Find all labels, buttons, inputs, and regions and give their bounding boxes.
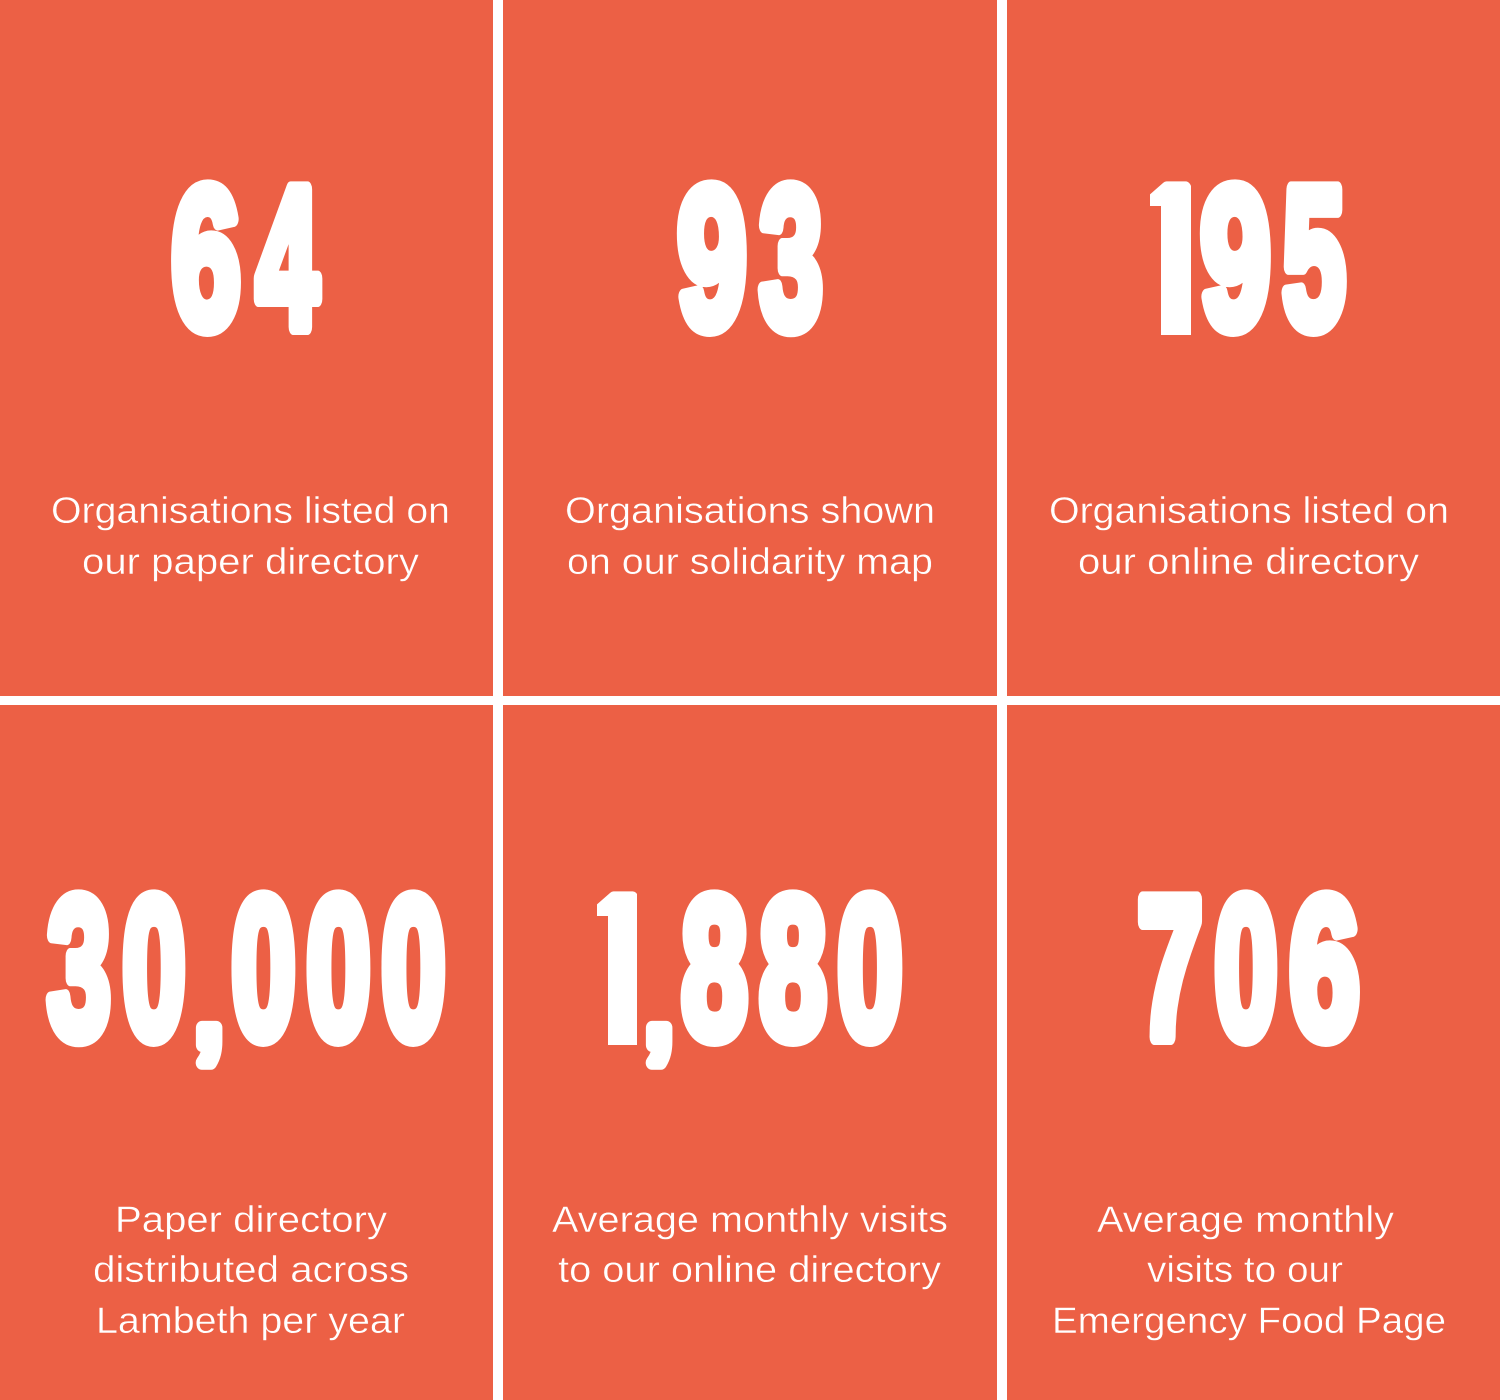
number: 30,000: 0 [382, 857, 446, 1080]
text: paper directory distributed across Lambeth per year: Paper directory [115, 1199, 388, 1240]
number: 64: 4 [256, 147, 318, 370]
number: 93: 3 [760, 147, 822, 370]
panel: paper directory distribution [0, 705, 493, 1400]
text: organisations listed on our paper directory: Organisations listed on [51, 490, 450, 531]
text: average monthly visits to our online directory: to our online directory [558, 1249, 942, 1290]
number: 30,000: 0 [122, 857, 186, 1080]
text: average monthly visits to our Emergency Food Page: Emergency Food Page [1052, 1300, 1446, 1341]
number: 195 [1150, 179, 1347, 337]
panel: emergency food page monthly visits [1007, 705, 1500, 1400]
text: average monthly visits to our online directory: Average monthly visits [552, 1199, 948, 1240]
text: organisations shown on our solidarity map: Organisations shown [565, 490, 935, 531]
number: 195: 9 [1200, 147, 1270, 370]
number: 1,880 [597, 889, 902, 1070]
number: 706: 6 [1290, 857, 1360, 1080]
number: 30,000: , [195, 942, 223, 1070]
number: 64: 6 [172, 147, 240, 370]
number: 1,880: 1 [578, 857, 660, 1080]
number: 30,000: 0 [232, 857, 296, 1080]
text: paper directory distributed across Lambeth per year: distributed across [93, 1249, 409, 1290]
number: 30,000: 3 [48, 857, 110, 1080]
number: 1,880: 8 [682, 857, 748, 1080]
number: 1,880: 0 [838, 857, 902, 1080]
text: organisations listed on our paper directory: our paper directory [82, 541, 420, 582]
panel: online directory organisations [1007, 0, 1500, 696]
number: 93: 9 [678, 147, 746, 370]
panel: paper directory organisations [0, 0, 493, 696]
text: paper directory distributed across Lambeth per year: Lambeth per year [96, 1300, 405, 1341]
number: 195: 5 [1282, 147, 1346, 370]
text: average monthly visits to our Emergency Food Page: visits to our [1147, 1249, 1343, 1290]
number: 1,880: , [645, 942, 673, 1070]
text: average monthly visits to our Emergency Food Page: Average monthly [1097, 1199, 1395, 1240]
text: organisations shown on our solidarity map: on our solidarity map [567, 541, 933, 582]
number: 706: 7 [1138, 857, 1202, 1080]
text: organisations listed on our online directory: Organisations listed on [1049, 490, 1449, 531]
panel: solidarity map organisations [503, 0, 997, 696]
panel: online directory monthly visits [503, 705, 997, 1400]
number: 1,880: 8 [760, 857, 826, 1080]
number: 195: 1 [1131, 147, 1213, 370]
number: 30,000: 0 [306, 857, 370, 1080]
number: 706: 0 [1214, 857, 1278, 1080]
text: organisations listed on our online directory: our online directory [1078, 541, 1420, 582]
